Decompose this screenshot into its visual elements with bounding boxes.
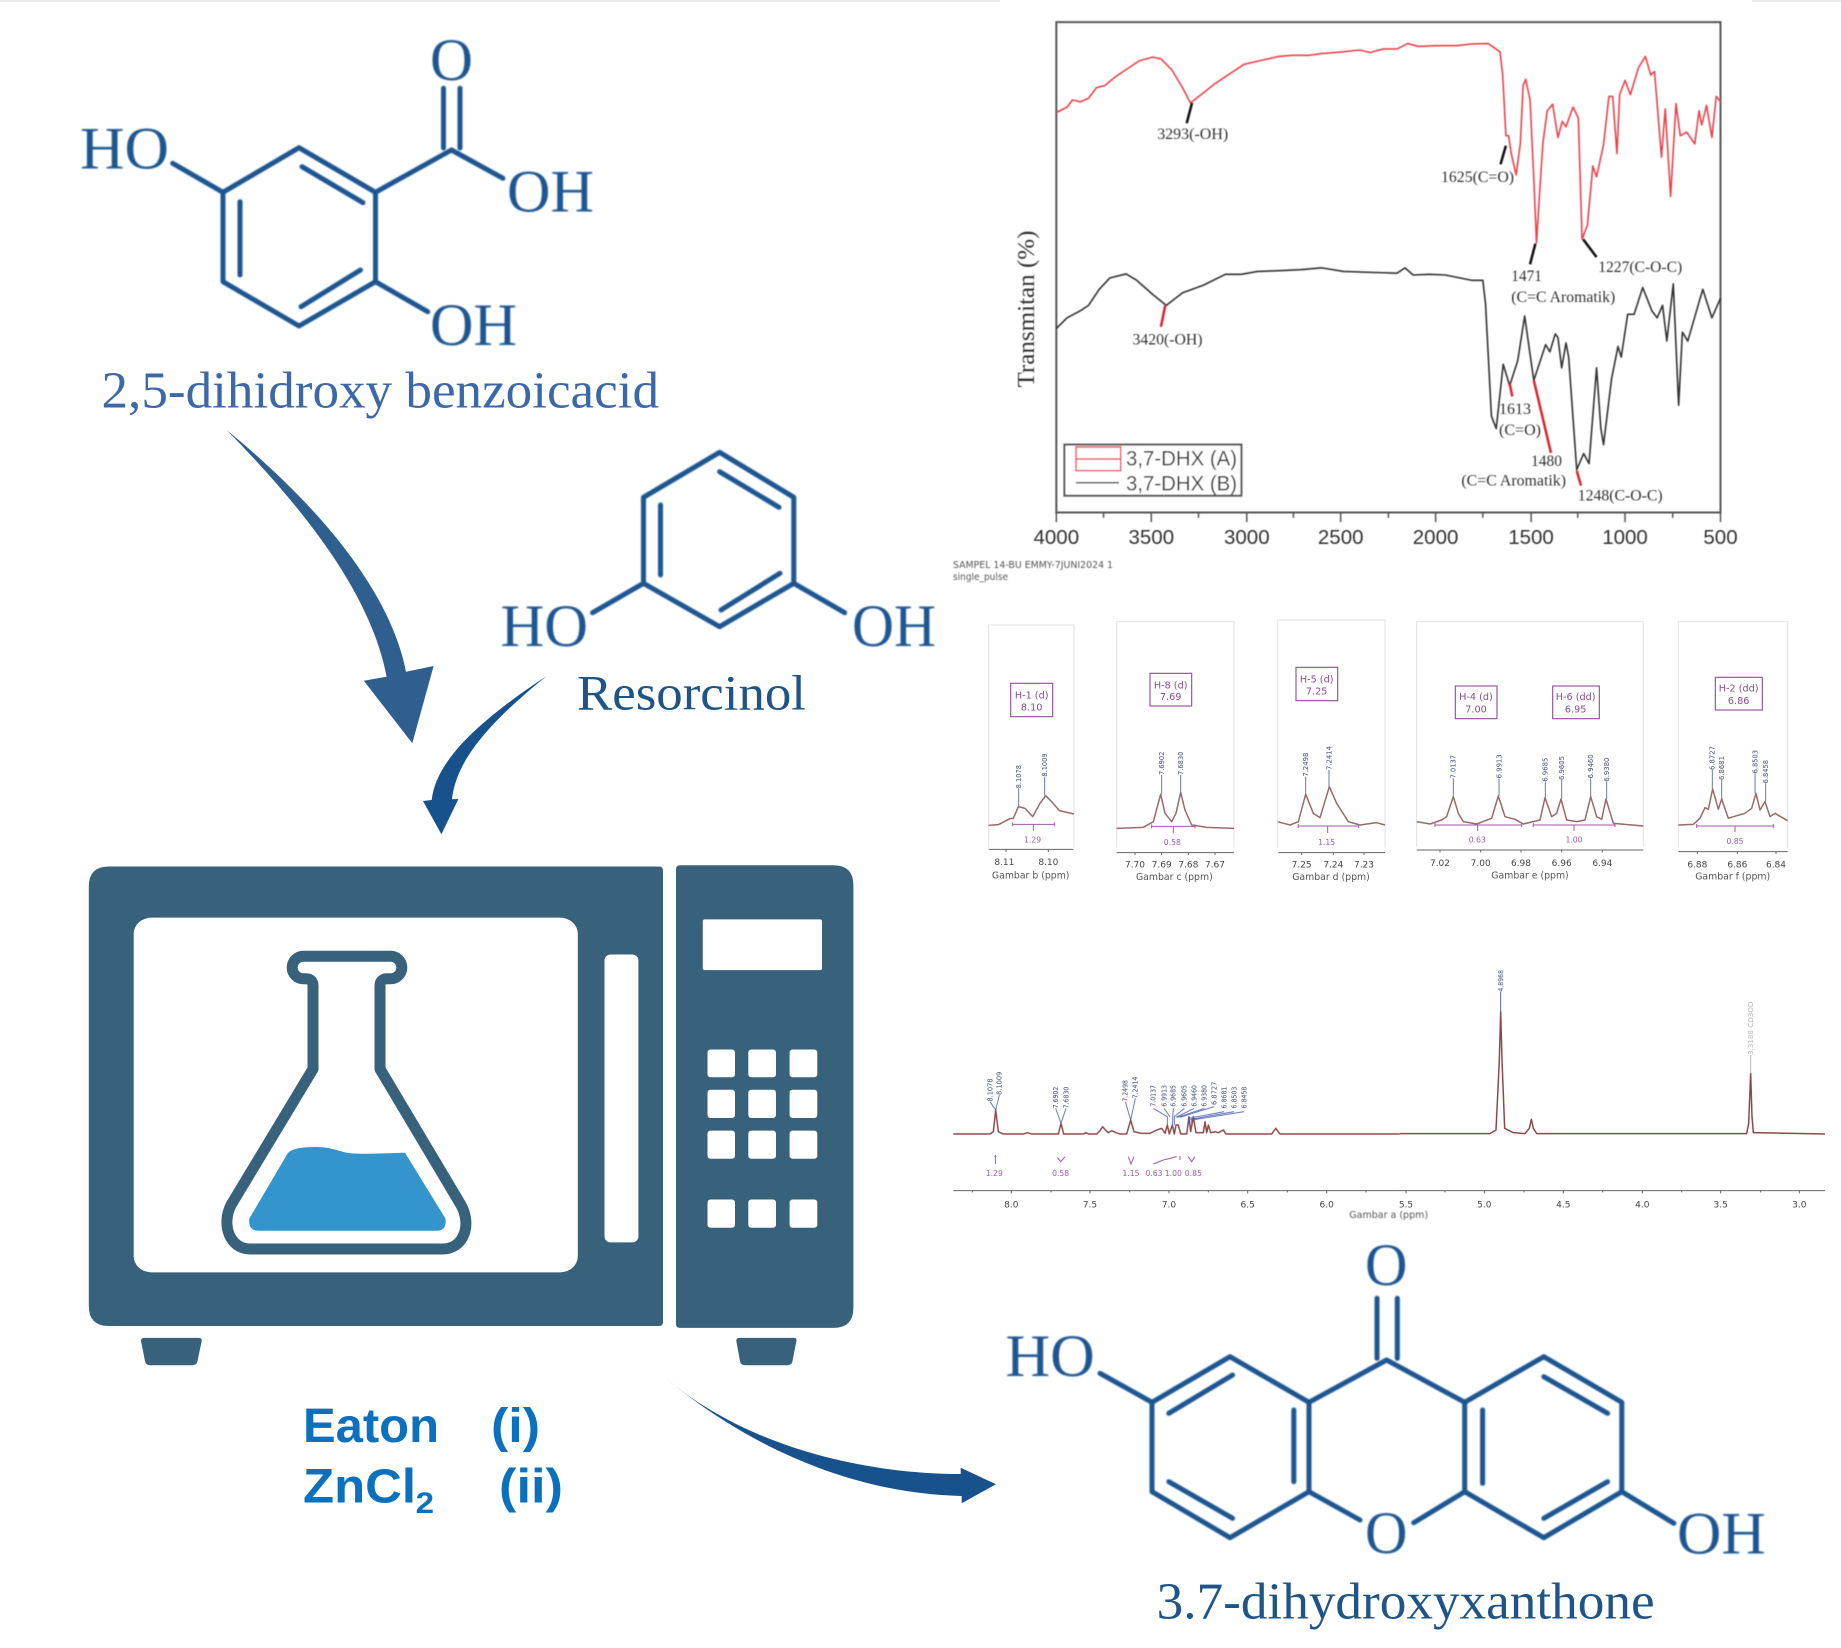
NMR expansion panels b, c, d — [989, 620, 1385, 883]
FTIR x axis labels: 2000 — [1413, 526, 1458, 549]
reagent labels: Eaton (i), ZnCl2 (ii): (i) — [491, 1400, 540, 1453]
panel: Gambar f H-2: 0.85 — [1726, 837, 1744, 846]
icon: Erlenmeyer flask outline — [227, 956, 466, 1249]
panel: Gambar e H-4 and H-6: Gambar e (ppm) — [1491, 870, 1569, 881]
chart: full 1H NMR spectrum, left part: 8.1009 — [995, 1071, 1004, 1095]
reagent labels: Eaton (i), ZnCl2 (ii): (ii) — [499, 1461, 563, 1514]
FTIR x axis labels: 1500 — [1508, 526, 1554, 549]
chart: full 1H NMR spectrum, left part: 6.8727 — [1209, 1081, 1218, 1105]
atom labels: benzoic acid: OH — [507, 159, 594, 225]
panel: Gambar e H-4 and H-6 — [1417, 622, 1643, 881]
chart: FTIR spectra — [1014, 22, 1738, 549]
atom labels: xanthone: HO — [1006, 1323, 1095, 1389]
panel: Gambar c H-8: 7.69 — [1152, 860, 1172, 870]
chart: full 1H NMR spectrum, right part: 4.5 — [1556, 1200, 1570, 1210]
panel: Gambar b H-1: 8.1078 — [1014, 765, 1023, 788]
panel: Gambar e H-4 and H-6: 6.9380 — [1602, 757, 1611, 782]
panel: Gambar e H-4 and H-6: 6.9460 — [1586, 754, 1595, 778]
panel: Gambar e H-4 and H-6: 7.00 — [1471, 859, 1491, 869]
FTIR x axis labels: 4000 — [1033, 526, 1079, 549]
atom labels: resorcinol: HO — [500, 593, 588, 659]
chart: full 1H NMR spectrum, left part: 8.1078 — [985, 1078, 994, 1102]
panel: Gambar b H-1: H-1 (d) — [1015, 690, 1048, 701]
reagent labels: Eaton (i), ZnCl2 (ii): ZnCl — [303, 1461, 416, 1514]
compound name: Resorcinol: Resorcinol — [577, 664, 806, 720]
FTIR x axis labels: 3000 — [1224, 526, 1270, 549]
panel: Gambar b H-1: 8.1009 — [1040, 753, 1049, 777]
panel: Gambar e H-4 and H-6: 6.9685 — [1541, 757, 1550, 782]
chart: full 1H NMR spectrum, left part: 6.9685 — [1169, 1085, 1178, 1107]
FTIR x axis labels: 1000 — [1602, 526, 1648, 549]
panel: Gambar e H-4 and H-6: 6.95 — [1565, 704, 1586, 715]
panel: Gambar f H-2: 6.8503 — [1750, 750, 1759, 773]
panel: Gambar f H-2: 6.88 — [1687, 861, 1708, 871]
panel: Gambar d H-5: H-5 (d) — [1300, 674, 1333, 685]
chart: full 1H NMR spectrum, right part: 3.3188 CD3OD — [1747, 1002, 1755, 1055]
FTIR peak annotations: (C=O) — [1499, 422, 1541, 439]
chart: full 1H NMR spectrum, left part: 7.6902 — [1051, 1087, 1060, 1108]
microwave oven — [89, 865, 853, 1365]
chart: full 1H NMR spectrum, right part: 4.0 — [1635, 1200, 1650, 1210]
microwave display — [703, 919, 822, 970]
chart: full 1H NMR spectrum, right part: 3.0 — [1792, 1200, 1807, 1210]
NMR sample header — [953, 560, 1113, 583]
panel: Gambar c H-8: 7.68 — [1178, 860, 1199, 870]
NMR expansion panels e, f — [1417, 622, 1788, 882]
chart: full 1H NMR spectrum, right part: 4.8968 — [1496, 970, 1505, 992]
chart: full 1H NMR spectrum, right part: 5.0 — [1477, 1200, 1492, 1210]
FTIR peak annotations: (C=C Aromatik) — [1461, 473, 1566, 490]
panel: Gambar c H-8 — [1117, 622, 1234, 883]
panel: Gambar e H-4 and H-6: 7.0137 — [1449, 755, 1458, 778]
panel: Gambar c H-8: H-8 (d) — [1154, 680, 1187, 691]
chart: full 1H NMR spectrum, right part: 3.5 — [1714, 1200, 1728, 1210]
reagent labels: Eaton (i), ZnCl2 (ii): 2 — [416, 1487, 434, 1520]
panel: Gambar d H-5: 7.2498 — [1301, 752, 1310, 777]
bonds: benzoic acid skeleton — [173, 88, 503, 326]
FTIR legend: 3,7-DHX (B) — [1126, 472, 1237, 496]
molecule: 3,7-dihydroxyxanthone — [1006, 1232, 1766, 1566]
FTIR legend — [1064, 445, 1241, 496]
chart: full 1H NMR spectrum, left part: 1.29 — [986, 1169, 1003, 1178]
FTIR y axis title: Transmitan (%) — [1014, 230, 1040, 388]
panel: Gambar b H-1: 8.10 — [1038, 858, 1059, 868]
panel: Gambar f H-2: 6.86 — [1728, 696, 1749, 707]
microwave window — [134, 918, 578, 1272]
chart: full 1H NMR spectrum, left part: 6.9913 — [1159, 1085, 1168, 1107]
atom labels: benzoic acid — [80, 27, 594, 358]
FTIR peak annotations — [1132, 126, 1682, 505]
panel: Gambar e H-4 and H-6: 7.00 — [1465, 704, 1487, 715]
chart: full 1H NMR spectrum, left part — [953, 1071, 1400, 1210]
panel: Gambar e H-4 and H-6: 7.02 — [1430, 859, 1450, 869]
panel: Gambar c H-8: 0.58 — [1164, 838, 1181, 847]
chart: full 1H NMR spectrum, left part: 0.63 — [1145, 1169, 1163, 1178]
chart: full 1H NMR spectrum, left part: 7.0137 — [1149, 1085, 1158, 1107]
microwave right foot — [736, 1338, 796, 1365]
panel: Gambar c H-8: 7.6830 — [1176, 751, 1185, 775]
arrow: microwave to xanthone — [667, 1379, 996, 1503]
FTIR peak annotations: 3420(-OH) — [1132, 332, 1202, 349]
FTIR x axis labels: 2500 — [1318, 526, 1364, 549]
chart: full 1H NMR spectrum, left part: 6.9380 — [1200, 1085, 1209, 1107]
FTIR peak annotations: 1625(C=O) — [1441, 169, 1514, 186]
panel: Gambar e H-4 and H-6: 6.9605 — [1557, 756, 1566, 780]
arrow: resorcinol to microwave — [423, 676, 547, 834]
panel: Gambar c H-8: 7.69 — [1160, 692, 1181, 703]
panel: Gambar b H-1: 8.10 — [1021, 703, 1042, 714]
panel: Gambar c H-8: 7.70 — [1125, 860, 1145, 870]
panel: Gambar e H-4 and H-6: 6.98 — [1511, 859, 1531, 869]
FTIR x axis labels — [1033, 526, 1738, 549]
reagent labels: Eaton (i), ZnCl2 (ii) — [303, 1400, 563, 1520]
microwave control panel — [676, 865, 853, 1328]
FTIR x axis labels: 3500 — [1128, 526, 1174, 549]
bonds: xanthone skeleton — [1100, 1298, 1674, 1538]
atom labels: benzoic acid: HO — [80, 115, 169, 181]
microwave keypad — [708, 1050, 817, 1228]
panel: Gambar e H-4 and H-6: H-4 (d) — [1459, 692, 1493, 703]
chart: full 1H NMR spectrum, left part: 0.58 — [1052, 1169, 1069, 1178]
NMR sample header: SAMPEL 14-BU EMMY-7JUNI2024 1 — [953, 560, 1113, 571]
panel: Gambar d H-5: 7.24 — [1323, 860, 1344, 870]
icon: flask liquid — [249, 1147, 446, 1231]
panel: Gambar f H-2 — [1678, 622, 1788, 882]
panel: Gambar e H-4 and H-6: 6.9913 — [1494, 754, 1503, 778]
panel: Gambar e H-4 and H-6: 6.96 — [1552, 859, 1572, 869]
panel: Gambar e H-4 and H-6: 6.94 — [1592, 859, 1613, 869]
chart: full 1H NMR spectrum, left part: 6.9460 — [1189, 1085, 1198, 1107]
panel: Gambar b H-1: 1.29 — [1024, 836, 1041, 845]
chart: full 1H NMR spectrum, left part: 8.0 — [1004, 1200, 1019, 1210]
chart: full 1H NMR spectrum, right part: 5.5 — [1399, 1200, 1413, 1210]
bonds: resorcinol ring — [593, 452, 845, 627]
chart: full 1H NMR spectrum, left part: 1.00 — [1165, 1169, 1182, 1178]
panel: Gambar f H-2: 6.8458 — [1761, 760, 1770, 783]
panel: Gambar d H-5: 7.25 — [1306, 686, 1327, 697]
chart: full 1H NMR spectrum, left part: 6.5 — [1241, 1200, 1255, 1210]
panel: Gambar f H-2: 6.8727 — [1708, 746, 1717, 770]
chart: full 1H NMR spectrum, right part — [1399, 970, 1825, 1210]
panel: Gambar d H-5: 1.15 — [1318, 838, 1335, 847]
chart: full 1H NMR spectrum, left part: 0.85 — [1185, 1169, 1202, 1178]
panel: Gambar e H-4 and H-6: H-6 (dd) — [1556, 692, 1596, 703]
panel: Gambar d H-5: 7.25 — [1292, 860, 1312, 870]
panel: Gambar f H-2: H-2 (dd) — [1719, 684, 1759, 695]
panel: Gambar c H-8: 7.67 — [1205, 860, 1225, 870]
FTIR peak annotations: 1471 — [1511, 268, 1542, 285]
chart: full 1H NMR spectrum, left part: 6.0 — [1320, 1200, 1334, 1210]
FTIR peak annotations: 1248(C-O-C) — [1578, 488, 1663, 505]
panel: Gambar f H-2: 6.8681 — [1717, 756, 1726, 780]
panel: Gambar b H-1 — [989, 625, 1074, 881]
panel: Gambar d H-5: 7.23 — [1354, 860, 1374, 870]
molecule: 2,5-dihydroxybenzoic acid — [80, 27, 594, 358]
FTIR peak annotations: (C=C Aromatik) — [1511, 289, 1615, 306]
compound name: 3.7-dihydroxyxanthone: 3.7-dihydroxyxanthone — [1157, 1573, 1655, 1630]
compound name: 2,5-dihidroxy benzoicacid: 2,5-dihidroxy benzoicacid — [102, 362, 659, 420]
atom labels: resorcinol — [500, 593, 936, 659]
chart: full 1H NMR spectrum, left part: 7.2414 — [1131, 1076, 1140, 1098]
atom labels: benzoic acid: OH — [430, 292, 517, 358]
chart: full 1H NMR spectrum, left part: 7.5 — [1083, 1200, 1097, 1210]
FTIR peak annotations: 1480 — [1531, 453, 1562, 470]
panel: Gambar b H-1: Gambar b (ppm) — [992, 870, 1069, 881]
FTIR legend: 3,7-DHX (A) — [1126, 448, 1237, 470]
panel: Gambar f H-2: 6.84 — [1766, 861, 1786, 871]
panel: Gambar e H-4 and H-6: 0.63 — [1469, 836, 1486, 845]
NMR x axis caption: Gambar a (ppm): Gambar a (ppm) — [1349, 1210, 1428, 1221]
panel: Gambar f H-2: Gambar f (ppm) — [1695, 871, 1770, 882]
atom labels: xanthone: OH — [1677, 1500, 1766, 1566]
chart: full 1H NMR spectrum, left part: 7.0 — [1162, 1200, 1176, 1210]
chart: full 1H NMR spectrum, left part: 6.8458 — [1239, 1086, 1248, 1108]
panel: Gambar d H-5: Gambar d (ppm) — [1292, 872, 1370, 883]
microwave handle — [604, 954, 638, 1242]
NMR sample header: single_pulse — [953, 572, 1008, 583]
chart: full 1H NMR spectrum, left part: 7.6830 — [1061, 1086, 1070, 1108]
atom labels: xanthone: O — [1365, 1500, 1408, 1566]
chart: full 1H NMR spectrum, left part: 6.9605 — [1180, 1085, 1189, 1107]
atom labels: resorcinol: OH — [852, 593, 936, 659]
panel: Gambar d H-5: 7.2414 — [1324, 746, 1333, 770]
panel: Gambar c H-8: 7.6902 — [1157, 752, 1166, 775]
arrow: benzoic acid to microwave — [227, 430, 434, 743]
panel: Gambar f H-2: 6.86 — [1727, 861, 1748, 871]
microwave left foot — [141, 1338, 202, 1365]
chart: full 1H NMR spectrum, left part: 1.15 — [1122, 1169, 1140, 1178]
chart: full 1H NMR spectrum, left part: 6.8681 — [1219, 1087, 1228, 1108]
molecule: resorcinol — [500, 452, 936, 659]
panel: Gambar b H-1: 8.11 — [994, 858, 1014, 868]
FTIR plot lines — [1056, 22, 1720, 522]
chart: full 1H NMR spectrum, left part: 6.8503 — [1229, 1086, 1238, 1108]
FTIR peak annotations: 1613 — [1499, 401, 1531, 418]
panel: Gambar c H-8: Gambar c (ppm) — [1136, 872, 1213, 883]
FTIR x axis labels: 500 — [1703, 526, 1738, 549]
panel: Gambar e H-4 and H-6: 1.00 — [1565, 836, 1583, 845]
panel: Gambar d H-5 — [1278, 620, 1385, 883]
atom labels: xanthone — [1006, 1232, 1766, 1566]
atom labels: xanthone: O — [1365, 1232, 1408, 1298]
FTIR peak annotations: 3293(-OH) — [1157, 126, 1228, 143]
reagent labels: Eaton (i), ZnCl2 (ii): Eaton — [303, 1400, 439, 1453]
chart: full 1H NMR spectrum, left part: 7.2498 — [1121, 1080, 1130, 1102]
atom labels: benzoic acid: O — [430, 27, 473, 93]
FTIR peak annotations: 1227(C-O-C) — [1598, 259, 1682, 276]
microwave door body — [89, 866, 663, 1326]
